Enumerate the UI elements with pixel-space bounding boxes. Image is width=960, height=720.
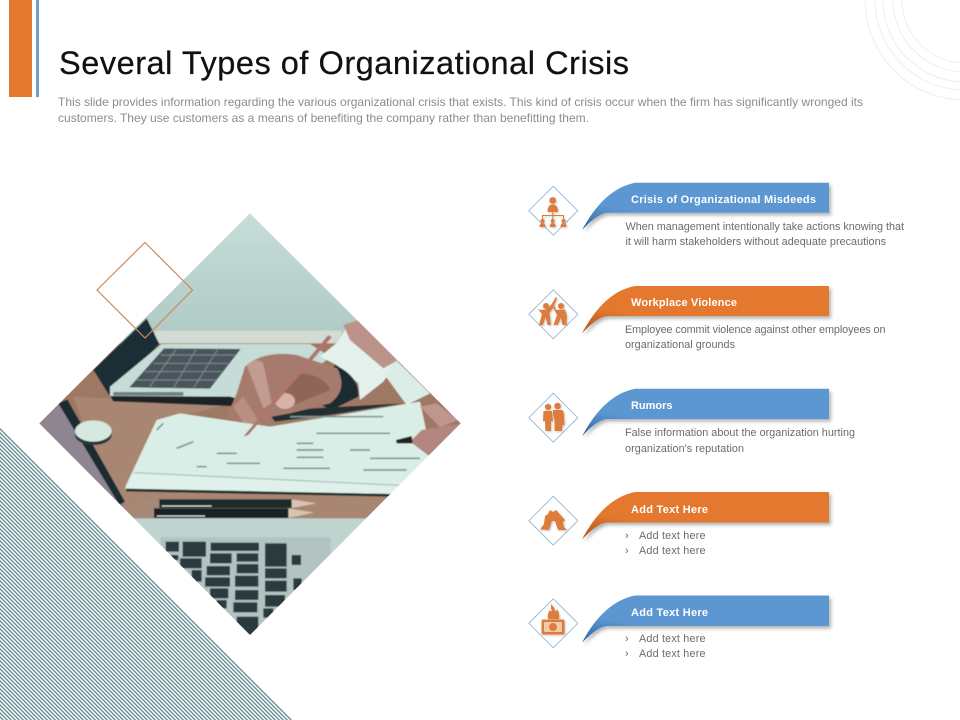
orange diamond outline xyxy=(97,242,192,338)
bullet list xyxy=(625,530,706,557)
description: it will harm stakeholders without adequate precautions xyxy=(626,236,887,248)
icon: two figures fighting in diamond xyxy=(529,290,578,339)
bullet list: › xyxy=(625,530,629,542)
heading: Add Text Here xyxy=(631,607,708,619)
description xyxy=(625,427,855,455)
description xyxy=(625,324,886,351)
icon: organization hierarchy in diamond xyxy=(529,186,578,235)
striped triangle xyxy=(0,427,293,720)
description: False information about the organization hurting xyxy=(625,427,855,439)
decorative concentric arcs xyxy=(865,0,960,100)
icon: collapsing house in diamond xyxy=(529,496,578,545)
ribbon header xyxy=(582,596,829,642)
ribbon header xyxy=(582,183,829,230)
bullet list: Add text here xyxy=(639,545,706,557)
item 4: add text here xyxy=(529,492,829,557)
heading: Crisis of Organizational Misdeeds xyxy=(631,194,816,206)
heading: Workplace Violence xyxy=(631,297,737,309)
title: Several Types of Organizational Crisis xyxy=(59,45,629,81)
bullet list: › xyxy=(625,545,629,557)
subtitle text: customers. They use customers as a means of benefiting the company rather than benefitting them. xyxy=(58,111,589,125)
item 5: add text here xyxy=(529,596,829,660)
bullet list: › xyxy=(625,633,629,645)
description: organization's reputation xyxy=(625,443,744,455)
item 1: crisis of organizational misdeeds xyxy=(529,183,904,248)
icon: two people standing in diamond xyxy=(529,393,578,442)
ribbon header xyxy=(582,389,829,436)
subtitle text xyxy=(58,95,863,125)
bullet list: Add text here xyxy=(639,633,706,645)
bullet list: Add text here xyxy=(639,530,706,542)
heading: Add Text Here xyxy=(631,504,708,516)
subtitle text: This slide provides information regarding the various organizational crisis that exists. This kind of crisis occur when the firm has significantly wronged its xyxy=(58,95,863,109)
header accent bars xyxy=(9,0,39,97)
icon: burning money in diamond xyxy=(529,599,578,648)
description: Employee commit violence against other employees on xyxy=(625,324,886,336)
photo: desk with laptop and hands writing xyxy=(30,200,470,642)
ribbon header xyxy=(582,492,829,540)
bullet list xyxy=(625,633,706,660)
description xyxy=(626,221,904,248)
description: When management intentionally take actions knowing that xyxy=(626,221,904,233)
heading: Rumors xyxy=(631,400,672,412)
item 2: workplace violence xyxy=(529,286,886,351)
ribbon header xyxy=(582,286,829,333)
bullet list: Add text here xyxy=(639,648,706,660)
description: organizational grounds xyxy=(625,339,736,351)
bullet list: › xyxy=(625,648,629,660)
item 3: rumors xyxy=(529,389,855,455)
